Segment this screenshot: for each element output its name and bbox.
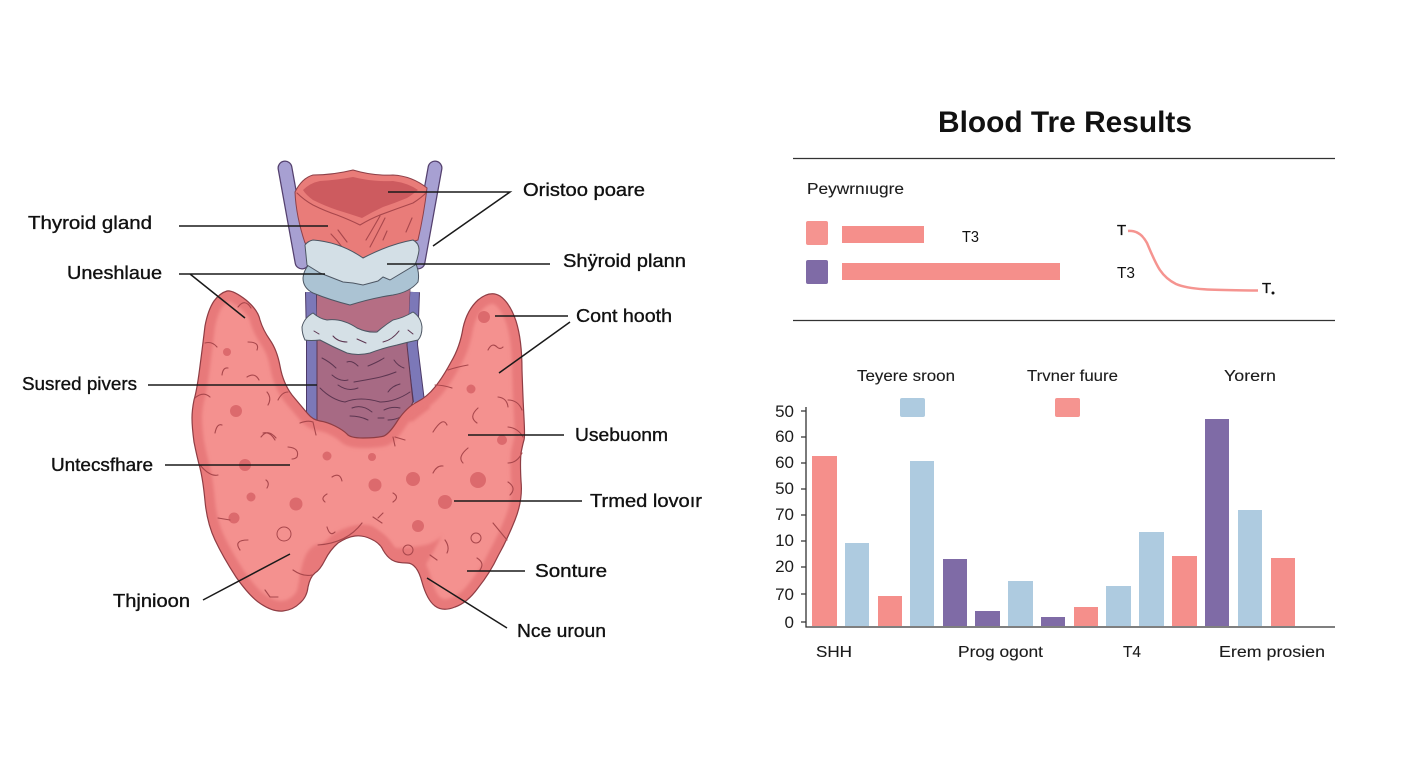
- x axis labels: SHH: [816, 644, 852, 661]
- curve: hormone decline: T: [1262, 280, 1271, 297]
- x axis labels: Prog ogont: [958, 644, 1044, 661]
- legend swatch: salmon: [1055, 398, 1080, 417]
- anatomy labels: left: Thjnioon: [113, 591, 190, 611]
- curve: hormone decline: T: [1117, 222, 1126, 239]
- chart axes and ticks: [801, 407, 1335, 627]
- chart legend labels: Yorern: [1224, 368, 1276, 385]
- anatomy labels: left: Susred pivers: [22, 374, 137, 394]
- icon: upper blood vessels: [285, 168, 435, 262]
- y axis labels: 50: [775, 479, 794, 498]
- anatomy labels: left: [22, 213, 190, 611]
- curve: hormone decline: T3: [1117, 265, 1135, 282]
- blue tracheal cartilage ring: [303, 262, 419, 305]
- bar: short T3: [842, 226, 924, 243]
- chart legend labels: [857, 368, 1276, 385]
- anatomy labels: right: Usebuonm: [575, 425, 668, 445]
- y axis labels: 0: [785, 613, 794, 632]
- trachea body: [317, 288, 413, 440]
- chart legend labels: Trvner fuure: [1027, 368, 1118, 385]
- anatomy labels: left: Thyroid gland: [28, 213, 152, 233]
- anatomy labels: right: Oristoo poare: [523, 180, 645, 200]
- y axis labels: 60: [775, 427, 794, 446]
- leader lines for anatomy labels: [148, 192, 582, 628]
- bars: [812, 419, 1295, 626]
- open follicles: [277, 527, 481, 555]
- title: Blood Tre Results: [938, 106, 1192, 139]
- anatomy labels: right: Shÿroid plann: [563, 251, 686, 271]
- panel: top result bars and curve: [793, 158, 1335, 320]
- x axis labels: [816, 644, 1325, 661]
- anatomy labels: right: Nce uroun: [517, 621, 606, 641]
- thyroid surface creases: [195, 303, 523, 597]
- legend swatch: blue: [900, 398, 925, 417]
- y axis labels: 10: [775, 531, 794, 550]
- anatomy labels: left: Uneshlaue: [67, 263, 162, 283]
- curve: hormone decline: [1117, 222, 1274, 297]
- y axis labels: 70: [775, 585, 794, 604]
- y axis labels: 50: [775, 402, 794, 421]
- anatomy labels: right: Cont hooth: [576, 306, 672, 326]
- anatomical illustration: thyroid gland and trachea: [192, 168, 524, 611]
- x axis labels: T4: [1123, 644, 1141, 661]
- anatomy labels: right: Sonture: [535, 561, 607, 581]
- anatomy labels: left: Untecsfhare: [51, 455, 153, 475]
- legend swatch: salmon: [806, 221, 828, 245]
- icon: lower blood vessels: [311, 292, 419, 425]
- panel heading: Peywrnıugre: [807, 181, 904, 198]
- y axis labels: 60: [775, 453, 794, 472]
- y axis labels: 20: [775, 557, 794, 576]
- thyroid nodules: [223, 311, 507, 532]
- chart legend labels: Teyere sroon: [857, 368, 955, 385]
- anatomy labels: right: [517, 180, 702, 641]
- legend swatch: purple: [806, 260, 828, 284]
- pale lower cartilage ring: [302, 312, 422, 354]
- panel: bar chart: [775, 368, 1335, 661]
- thyroid gland lobes and isthmus: [192, 291, 524, 611]
- pale upper cartilage ring: [305, 240, 419, 285]
- bar value label: T3: [962, 229, 979, 246]
- y axis labels: 70: [775, 505, 794, 524]
- x axis labels: Erem prosien: [1219, 644, 1325, 661]
- y axis labels: [775, 402, 794, 632]
- bar: long T3: [842, 263, 1060, 280]
- cup of upper trachea: [295, 170, 427, 258]
- anatomy labels: right: Trmed lovoır: [590, 491, 702, 511]
